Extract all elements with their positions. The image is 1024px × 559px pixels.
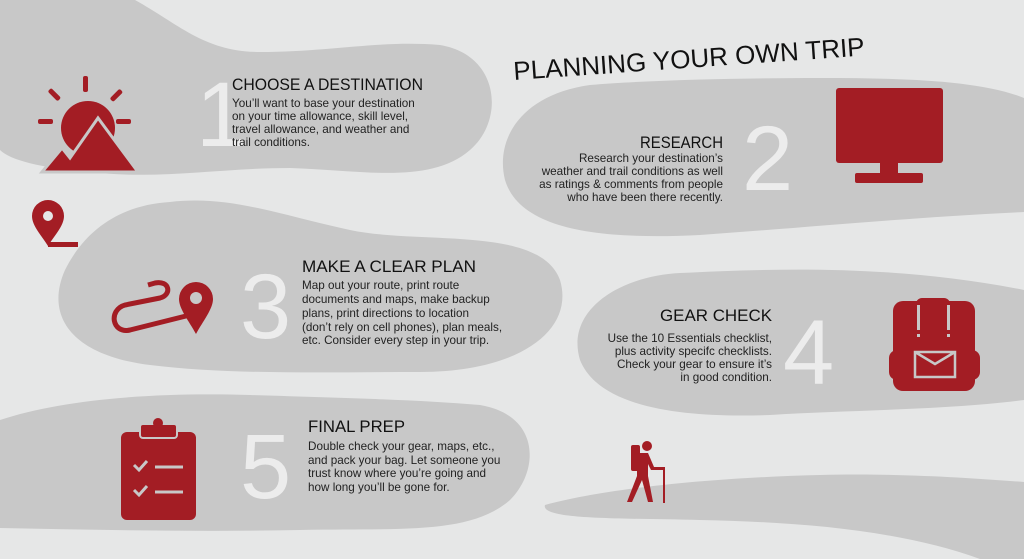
icon: sun and mountain <box>38 76 138 172</box>
step 4 text: Use the 10 Essentials checklist, <box>608 332 772 345</box>
step 1 text: travel allowance, and weather and <box>232 123 409 136</box>
step 2 text <box>539 133 723 204</box>
icon: clipboard <box>121 418 196 520</box>
step 4 text: in good condition. <box>680 371 772 384</box>
step 1 text: on your time allowance, skill level, <box>232 110 408 123</box>
step 4 text <box>608 306 773 384</box>
numeral 1: 1 <box>196 64 247 166</box>
trail path <box>545 475 1024 559</box>
step 3 text <box>302 257 502 347</box>
step 2 text: weather and trail conditions as well <box>541 165 723 178</box>
step 2 text: who have been there recently. <box>566 191 723 204</box>
numeral 2: 2 <box>742 108 793 210</box>
numeral 3: 3 <box>240 256 291 358</box>
step 2 text: RESEARCH <box>640 133 723 152</box>
step 5 text: how long you’ll be gone for. <box>308 481 450 494</box>
step 1 text: CHOOSE A DESTINATION <box>232 75 423 94</box>
icon: small pin <box>32 200 78 247</box>
title: PLANNING YOUR OWN TRIP <box>512 32 866 86</box>
step 1 text: trail conditions. <box>232 136 310 149</box>
step 3 text: etc. Consider every step in your trip. <box>302 334 489 347</box>
step 5 text: Double check your gear, maps, etc., <box>308 440 494 453</box>
step 5 text: and pack your bag. Let someone you <box>308 454 500 467</box>
step 4 text: GEAR CHECK <box>660 306 773 325</box>
blob: step 4 <box>578 270 1024 416</box>
step 2 text: Research your destination’s <box>579 152 723 165</box>
blob: step 3 <box>58 201 562 372</box>
blob: step 5 <box>0 394 530 531</box>
step 5 text: FINAL PREP <box>308 417 405 436</box>
blob: step 2 <box>503 78 1024 236</box>
step 3 text: (don’t rely on cell phones), plan meals, <box>302 321 502 334</box>
icon: route pin <box>179 282 213 334</box>
numeral 4: 4 <box>783 302 834 404</box>
step 4 text: Check your gear to ensure it’s <box>617 358 772 371</box>
step 1 text: You’ll want to base your destination <box>232 97 415 110</box>
icon: hiker <box>627 441 665 503</box>
step 3 text: documents and maps, make backup <box>302 293 490 306</box>
icon: monitor <box>836 88 943 183</box>
step 3 text: Map out your route, print route <box>302 279 459 292</box>
numeral 5: 5 <box>240 416 291 518</box>
step 2 text: as ratings & comments from people <box>539 178 723 191</box>
icon: route <box>114 283 190 330</box>
step 4 text: plus activity specifc checklists. <box>615 345 772 358</box>
icon: backpack <box>889 298 980 391</box>
blob: step 1 <box>0 0 492 175</box>
step 1 text <box>232 75 423 149</box>
step 3 text: plans, print directions to location <box>302 307 469 320</box>
step 5 text <box>308 417 500 494</box>
step 5 text: trust know where you’re going and <box>308 467 486 480</box>
step 3 text: MAKE A CLEAR PLAN <box>302 257 476 276</box>
